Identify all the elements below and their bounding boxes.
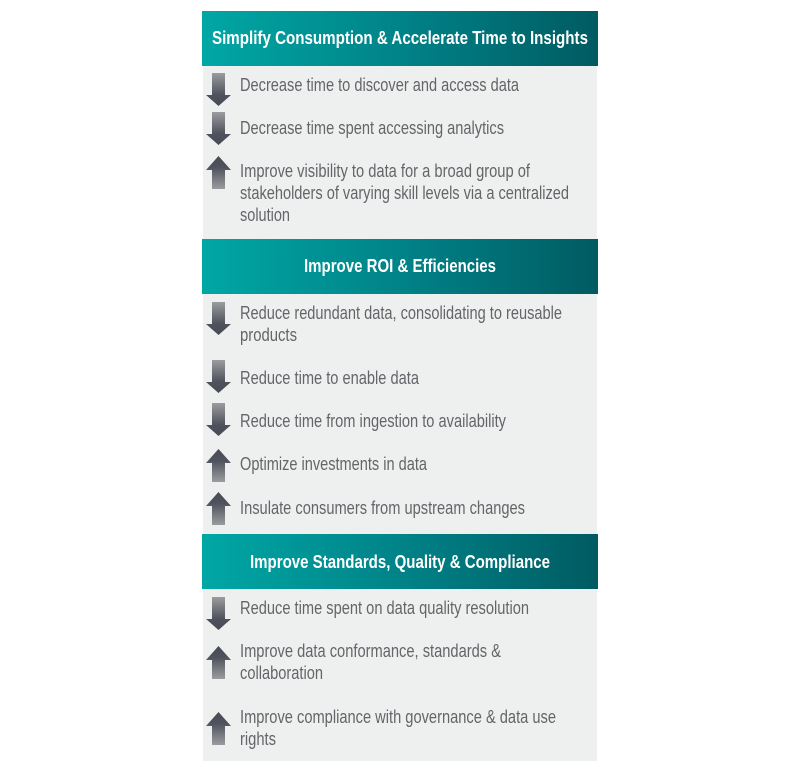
icon: up arrow	[206, 156, 231, 189]
text: discover: Decrease time to discover and access data	[240, 75, 520, 95]
text: compliance	[240, 707, 556, 749]
text: visibility	[240, 161, 569, 225]
icon: down arrow	[206, 302, 231, 335]
icon: down arrow	[206, 403, 231, 436]
heading: improve ROI	[202, 239, 598, 294]
icon: down arrow	[206, 360, 231, 393]
text: enable data: Reduce time to enable data	[240, 368, 420, 388]
text: redundant data	[240, 303, 562, 345]
heading: simplify consumption: Simplify Consumption & Accelerate Time to Insights	[212, 28, 588, 48]
icon: down arrow	[206, 73, 231, 106]
text: compliance: Improve compliance with governance & data use	[240, 707, 556, 727]
heading: simplify consumption	[202, 11, 598, 66]
heading: improve ROI: Improve ROI & Efficiencies	[304, 256, 496, 276]
text: ingestion: Reduce time from ingestion to availability	[240, 411, 506, 431]
panel: standards quality compliance	[202, 534, 598, 761]
text: visibility: stakeholders of varying skill levels via a centralized	[240, 183, 569, 203]
text: conformance: collaboration	[240, 663, 323, 683]
text: conformance	[240, 641, 501, 683]
panel: improve ROI	[202, 239, 598, 534]
panel: simplify consumption	[202, 11, 598, 239]
text: redundant data: Reduce redundant data, consolidating to reusable	[240, 303, 562, 323]
icon: up arrow	[206, 449, 231, 482]
text: compliance: rights	[240, 729, 276, 749]
icon: down arrow	[206, 597, 231, 630]
text: insulate: Insulate consumers from upstream changes	[240, 498, 525, 518]
icon: down arrow	[206, 112, 231, 145]
text: conformance: Improve data conformance, standards &	[240, 641, 501, 661]
heading: standards: Improve Standards, Quality & Compliance	[250, 552, 550, 572]
text: redundant data: products	[240, 325, 297, 345]
text: analytics: Decrease time spent accessing analytics	[240, 118, 504, 138]
text: quality resolution: Reduce time spent on data quality resolution	[240, 598, 529, 618]
text: investments: Optimize investments in data	[240, 454, 428, 474]
heading: standards	[202, 534, 598, 589]
icon: up arrow	[206, 646, 231, 679]
icon: up arrow	[206, 492, 231, 525]
text: visibility: Improve visibility to data for a broad group of	[240, 161, 531, 181]
text: visibility: solution	[240, 205, 290, 225]
icon: up arrow	[206, 712, 231, 745]
